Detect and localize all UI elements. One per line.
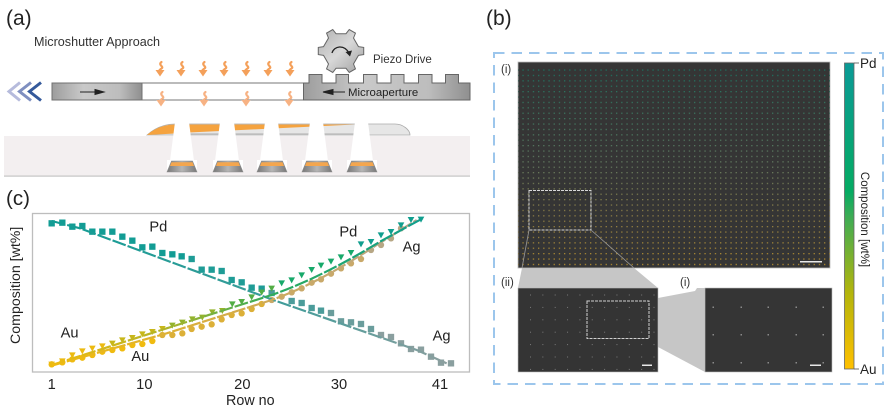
gradient film <box>147 124 410 135</box>
colorbar label: Pd: Pd <box>860 56 877 71</box>
colorbar label: Au: Au <box>860 362 877 377</box>
arrow: blade motion <box>80 90 104 94</box>
series labels: Au <box>131 349 149 365</box>
label (i) inset: (i) <box>680 277 690 289</box>
zoom lines <box>522 230 634 268</box>
label (c): (c) <box>6 187 30 210</box>
fit line: Au to Pd <box>52 218 423 365</box>
zoom box <box>587 301 649 338</box>
series labels: Au <box>61 325 79 341</box>
micrograph (i): full array <box>518 62 830 268</box>
connector: main to (ii) <box>518 268 658 288</box>
scale bar <box>642 364 652 366</box>
x axis ticks: 20 <box>234 377 250 393</box>
panel: (c) composition chart <box>6 187 470 409</box>
panel: (b) micrographs <box>486 7 883 384</box>
series labels <box>61 220 451 365</box>
shutter: toothed rack <box>304 74 470 100</box>
scale bar <box>810 364 821 366</box>
label (ii): (ii) <box>501 277 514 289</box>
series labels: Pd <box>339 225 357 241</box>
line chart: composition vs row <box>8 217 454 409</box>
label: Piezo Drive: Piezo Drive <box>373 54 432 66</box>
micrograph (i): high zoom <box>705 288 832 372</box>
substrate <box>4 136 470 176</box>
series labels: Ag <box>403 240 421 256</box>
series labels: Ag <box>433 329 451 345</box>
x axis ticks: 41 <box>432 377 448 393</box>
colorbar title: Composition [wt%] <box>858 172 870 267</box>
deposited spots <box>167 161 377 172</box>
series: Pd to Ag squares <box>48 219 454 366</box>
connector: (ii) to (i) <box>658 288 705 372</box>
label (a): (a) <box>6 7 32 30</box>
heading: Microshutter Approach: Microshutter Approach <box>34 35 160 49</box>
y axis title: Composition [wt%] <box>8 227 24 344</box>
series: Au to Pd triangles <box>48 217 424 368</box>
x axis title: Row no <box>226 393 275 409</box>
x axis ticks: 30 <box>331 377 347 393</box>
icons: upper evaporation arrows <box>156 62 294 76</box>
label (i) main: (i) <box>501 64 511 76</box>
arrow: microaperture pointer <box>323 90 345 94</box>
micrograph (ii): medium zoom <box>518 288 658 372</box>
shutter: open window <box>142 83 304 100</box>
series labels: Pd <box>149 220 167 236</box>
x axis ticks <box>48 377 448 393</box>
zoom box <box>529 190 591 230</box>
icon: gear <box>318 30 364 72</box>
icon: motion chevrons <box>9 82 41 100</box>
shutter: left blade <box>52 83 142 100</box>
label: Microaperture: Microaperture <box>348 87 418 99</box>
series: Au to Ag circles <box>48 225 404 367</box>
scale bar <box>800 261 822 262</box>
label (b): (b) <box>486 7 512 30</box>
x axis ticks: 1 <box>48 377 56 393</box>
panel: (a) microshutter schematic <box>4 7 470 177</box>
x axis ticks: 10 <box>136 377 152 393</box>
icons: lower evaporation arrows <box>156 92 294 106</box>
chart frame <box>32 214 470 372</box>
colorbar <box>844 56 877 377</box>
fit line: Pd to Ag <box>52 221 447 363</box>
beam openings <box>167 122 377 172</box>
fit line: Au to Ag <box>52 220 417 366</box>
dashed panel border <box>494 53 883 384</box>
